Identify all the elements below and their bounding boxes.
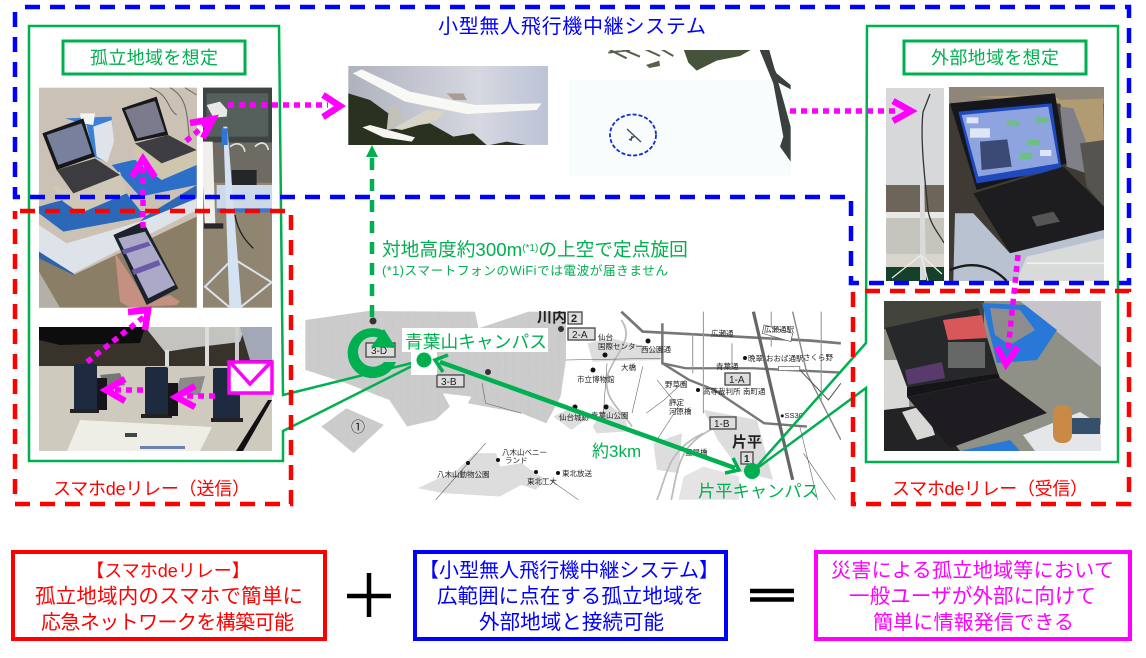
map of Sendai: 1-A — [729, 375, 745, 386]
map of Sendai: 片平 — [732, 434, 762, 451]
map of Sendai: 河原橋 — [669, 406, 692, 416]
arrow: antenna to drone — [228, 95, 340, 117]
icon: equals — [750, 591, 794, 600]
map of Sendai: 西公園通 — [641, 344, 671, 354]
text: altitude note: の上空で定点旋回 — [538, 239, 688, 260]
map of Sendai: 川内 — [537, 309, 567, 326]
arrow: laptop uplink — [132, 159, 155, 228]
label: isolated area: 孤立地域を想定 — [90, 48, 218, 68]
heading: system title: 小型無人飛行機中継システム — [438, 15, 706, 38]
panel: conclusion: 簡単に情報発信できる — [873, 611, 1074, 634]
photo: receiving laptop — [884, 301, 1101, 451]
panel: UAV relay summary: 広範囲に点在する孤立地域を — [437, 585, 704, 608]
label: Katahira campus: 片平キャンパス — [698, 481, 819, 501]
map of Sendai: 東北放送 — [562, 468, 592, 478]
map of Sendai: 3-D — [371, 346, 387, 357]
panel: Sumaho de Relay summary — [13, 552, 325, 639]
map of Sendai: 2 — [571, 313, 577, 325]
red dashed frame: sending — [15, 211, 291, 504]
blue dashed frame: relay system — [15, 7, 1129, 283]
panel: Sumaho de Relay summary: 応急ネットワークを構築可能 — [41, 611, 294, 634]
map of Sendai: ランド — [505, 456, 528, 465]
label: distance: 約3km — [592, 442, 641, 461]
map of Sendai: 仙台城跡 — [559, 412, 589, 422]
photo: smartphones on table — [39, 327, 272, 451]
map of Sendai: 市立博物館 — [577, 374, 615, 384]
icon: dashed circle around drone — [610, 114, 656, 156]
photo: laptops on crates with smartphone — [39, 88, 197, 308]
label: sending: スマホdeリレー（送信） — [53, 479, 250, 499]
photo: base station laptop — [949, 87, 1104, 281]
map of Sendai: 広瀬通駅 — [764, 324, 794, 334]
map of Sendai: 2-A — [572, 330, 588, 341]
map of Sendai: ① — [351, 419, 365, 435]
map of Sendai: 東北工大 — [527, 476, 557, 486]
map of Sendai: 八木山動物公園 — [437, 469, 490, 479]
icon: plus — [347, 573, 391, 617]
map of Sendai: 広瀬通 — [711, 328, 734, 338]
map of Sendai — [305, 309, 841, 500]
photo: drone in flight — [348, 66, 548, 145]
photo: drone against sky with tree — [608, 50, 791, 162]
map of Sendai: 評定 — [669, 398, 684, 407]
map of Sendai: 青葉通 — [716, 361, 739, 371]
arrow: phone relay middle — [176, 386, 215, 407]
map of Sendai: 南町通 — [743, 386, 766, 396]
arrow: phone relay to handset — [87, 310, 148, 362]
map of Sendai: ●SS30 — [780, 411, 803, 420]
arrow: distance between campuses — [435, 355, 739, 473]
arrow: green dashed uplink to drone — [366, 145, 378, 317]
map of Sendai: 野草園 — [665, 379, 688, 389]
text: altitude note: 対地高度約300m — [382, 239, 522, 260]
label: external area: 外部地域を想定 — [931, 48, 1059, 68]
arrow: laptop to antenna — [186, 119, 213, 141]
map of Sendai: 青葉山公園 — [591, 410, 628, 420]
arrow: drone to external antenna — [790, 101, 911, 121]
label: Aobayama campus — [402, 328, 548, 375]
icon: envelope — [229, 362, 272, 393]
panel: UAV relay summary: 外部地域と接続可能 — [479, 611, 664, 634]
photo: outside antenna pole — [886, 88, 944, 281]
panel: conclusion: 災害による孤立地域等において — [831, 559, 1114, 582]
map of Sendai: 霊屋橋 — [685, 447, 708, 457]
map of Sendai: さくら野 — [803, 353, 833, 362]
arrow: phone relay left — [106, 379, 143, 401]
label: isolated area — [63, 41, 245, 74]
photo: antenna pole on tripod — [203, 88, 272, 308]
map of Sendai: 国際センター — [598, 341, 643, 351]
panel frame: external area — [752, 26, 1118, 472]
label: external area — [904, 41, 1086, 74]
label: receiving: スマホdeリレー（受信） — [892, 479, 1088, 499]
map of Sendai: 高等裁判所 — [703, 386, 741, 396]
map of Sendai: 1 — [744, 454, 750, 465]
map of Sendai: 晩翠 — [748, 353, 763, 363]
arrow: base station to receiving laptop — [997, 255, 1018, 364]
panel frame: isolated area — [29, 26, 424, 461]
map of Sendai: 仙台 — [598, 332, 613, 342]
label: Katahira campus — [698, 463, 819, 501]
map of Sendai: 3-B — [441, 377, 457, 388]
panel: Sumaho de Relay summary: 孤立地域内のスマホで簡単に — [35, 585, 303, 608]
label: Aobayama campus: 青葉山キャンパス — [405, 332, 547, 352]
text: altitude note: (*1)スマートフォンのWiFiでは電波が届きません — [382, 264, 668, 278]
icon: tiny drone silhouette — [627, 129, 641, 142]
icon: circular flight path arrow — [348, 328, 396, 378]
panel: Sumaho de Relay summary: 【スマホdeリレー】 — [86, 561, 250, 581]
map of Sendai: おおば通駅 — [766, 353, 804, 363]
panel: conclusion — [816, 552, 1130, 639]
map of Sendai: 八木山ベニー — [502, 447, 547, 457]
map of Sendai: 大橋 — [621, 362, 636, 372]
text: altitude note — [382, 239, 688, 278]
text: altitude note: (*1) — [522, 243, 538, 254]
panel: conclusion: 一般ユーザが外部に向けて — [849, 585, 1096, 608]
map of Sendai: 1-B — [714, 419, 730, 430]
panel: UAV relay summary — [415, 552, 726, 639]
panel: UAV relay summary: 【小型無人飛行機中継システム】 — [419, 559, 719, 582]
red dashed frame: receiving — [853, 291, 1129, 504]
